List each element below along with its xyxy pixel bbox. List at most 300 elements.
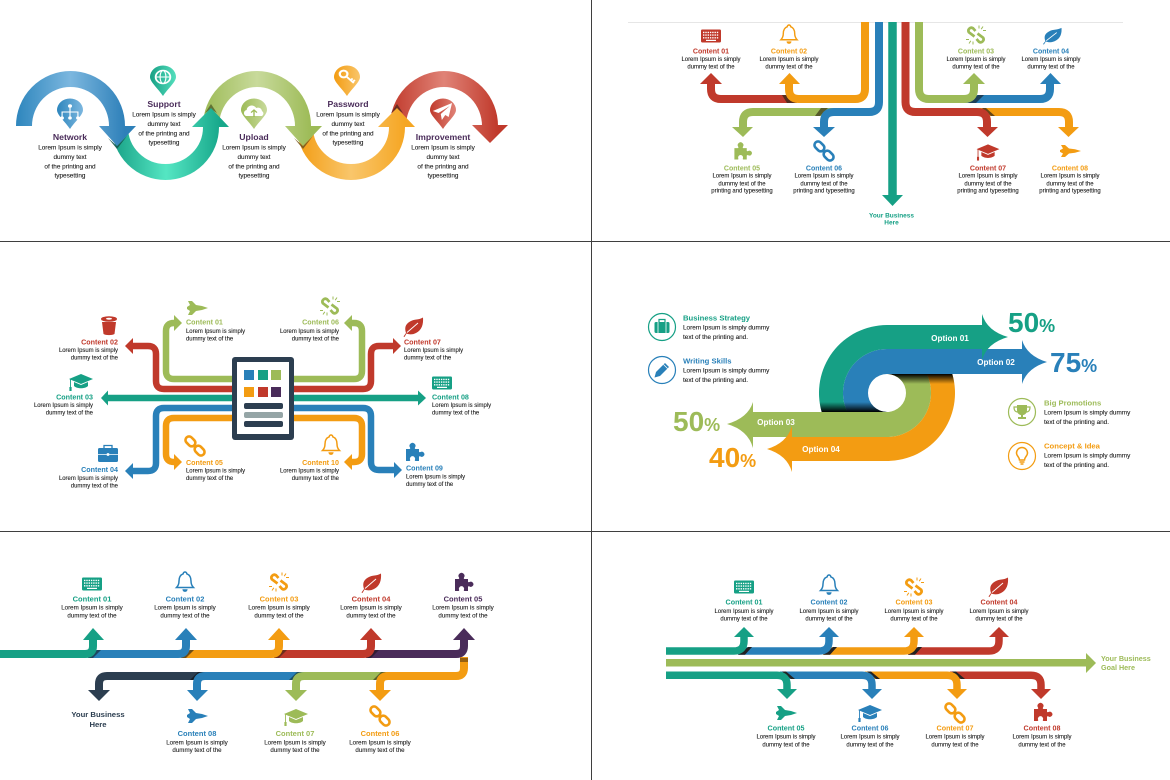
label: Content 06: dummy text of the (355, 747, 405, 754)
label: Content 01: Lorem Ipsum is simply (681, 57, 741, 63)
label: Content 06: Content 06 (806, 166, 842, 172)
label: Content 08: Content 08 (1052, 166, 1088, 172)
text: Writing Skills: text of the printing and. (683, 377, 748, 384)
label: Content 05: Content 05 (444, 594, 482, 604)
label: Content 04 (969, 598, 1029, 622)
pin icon: password key (334, 66, 360, 96)
label: Content 06 (840, 724, 900, 748)
label: Content 01: Content 01 (726, 598, 762, 606)
icon: rocket (776, 706, 797, 720)
label: Content 07 (404, 338, 463, 362)
label: Content 02 (154, 594, 217, 620)
label: Content 08: dummy text of the (172, 747, 222, 754)
label: Password: Lorem Ipsum is simply (316, 112, 381, 118)
label: Password (316, 99, 381, 146)
label: Content 03: Lorem Ipsum is simply (946, 57, 1006, 63)
label: Your Business Here: Here (884, 220, 899, 226)
label: Content 03: Content 03 (958, 48, 994, 56)
text: Writing Skills (683, 356, 770, 384)
label: Content 08: Lorem Ipsum is simply (432, 403, 491, 409)
label: Password: dummy text (331, 121, 365, 128)
label: Upload: typesetting (239, 172, 270, 180)
label: Content 09: Content 09 (406, 464, 443, 472)
icon: bin (101, 316, 117, 335)
label: Content 08: dummy text of the (432, 410, 480, 416)
icon: leaf (362, 574, 381, 593)
icon: puzzle (406, 443, 424, 461)
icon: bell (322, 435, 340, 455)
label: Content 08: Content 08 (178, 729, 216, 738)
label: Network: Lorem Ipsum is simply (38, 144, 103, 152)
label: Content 08 (1039, 166, 1101, 194)
band: option 03 green (727, 374, 931, 448)
blue arc arrow (24, 79, 136, 149)
text: Concept & Idea (1044, 442, 1131, 469)
red arc arrow (398, 79, 508, 143)
label: Content 10: Content 10 (302, 459, 339, 467)
text: Concept & Idea: text of the printing and. (1044, 462, 1109, 469)
label: Content 01 (714, 598, 774, 622)
label: Content 04: Content 04 (1033, 48, 1069, 56)
label: Your Business Goal Here (1101, 654, 1151, 672)
label: Your Business Goal Here: Goal Here (1101, 663, 1135, 672)
icon: chain (813, 140, 835, 162)
green arrow right (294, 315, 362, 379)
icon: keyboard (734, 580, 754, 594)
label: Password: typesetting (333, 140, 364, 146)
label: Content 05: Content 05 (724, 166, 760, 172)
label: Improvement: Lorem Ipsum is simply (411, 144, 476, 152)
label: Password: Password (327, 99, 369, 109)
label: Support: typesetting (149, 140, 180, 146)
green arc arrow (211, 79, 322, 149)
icon: chain (369, 705, 391, 727)
label: Content 09: dummy text of the (406, 482, 454, 488)
label: Support: Lorem Ipsum is simply (132, 112, 197, 118)
label: Content 05: Lorem Ipsum is simply (186, 468, 245, 474)
text: Concept & Idea: Lorem Ipsum is simply dummy (1044, 452, 1131, 460)
label: Option 02: Option 02 (977, 358, 1015, 367)
icon: puzzle (734, 142, 752, 160)
text: Writing Skills: Lorem Ipsum is simply dummy (683, 368, 770, 374)
label: Content 04: dummy text of the (346, 612, 396, 620)
label: Password: of the printing and (322, 130, 374, 138)
label: Content 07: dummy text of the (270, 747, 320, 754)
label: Content 02: dummy text of the (71, 356, 119, 362)
label: Network: of the printing and (44, 164, 96, 170)
label: Content 01 (186, 318, 245, 342)
orange arc arrow (305, 104, 415, 172)
icon: broken link (966, 26, 986, 44)
label: Content 03: Lorem Ipsum is simply (34, 403, 93, 409)
label: Content 08: Lorem Ipsum is simply (1040, 174, 1100, 180)
label: Content 03 (884, 598, 944, 622)
blue arrow right (294, 408, 402, 478)
label: Network: Network (53, 132, 87, 142)
green arrow left (166, 315, 232, 379)
label: Content 06: Content 06 (361, 729, 399, 738)
label: Upload: dummy text (237, 154, 271, 161)
label: Content 08: Lorem Ipsum is simply (1012, 734, 1072, 740)
label: Content 03: Lorem Ipsum is simply (248, 604, 311, 612)
label: Content 07: Content 07 (970, 166, 1006, 172)
label: Content 01: dummy text of the (687, 64, 735, 70)
label: Content 01: Lorem Ipsum is simply (714, 609, 774, 615)
value: 75 percent blue: 75% (1050, 347, 1097, 378)
icon: puzzle (455, 573, 473, 591)
label: Content 05: dummy text of the (762, 742, 810, 748)
purple top arrow 05 (366, 628, 475, 658)
orange arrow up (779, 22, 865, 99)
label: Content 07: Content 07 (276, 729, 314, 738)
band: option 01 teal (819, 314, 1008, 412)
label: Content 07: dummy text of the (404, 356, 452, 362)
label: Content 06: dummy text of the (846, 742, 894, 748)
icon: pencil circle (648, 356, 676, 384)
label: Content 08 (166, 729, 229, 754)
label: Content 08: Content 08 (1024, 724, 1060, 732)
icon: keyboard (701, 30, 721, 42)
label: Content 04: Content 04 (81, 466, 118, 474)
label: Content 07: Lorem Ipsum is simply (404, 348, 463, 354)
green goal arrow (666, 653, 1096, 673)
orange top arrow 03 (823, 627, 924, 655)
label: Improvement: typesetting (428, 172, 459, 180)
icon: cap (69, 374, 93, 391)
pin icon: improvement plane (430, 98, 456, 129)
label: Content 06 (349, 729, 412, 754)
label: Your Business Here: Your Business (869, 212, 914, 220)
panel: goal timeline (666, 575, 1151, 748)
label: Content 03: Content 03 (56, 394, 93, 402)
label: Option 04: Option 04 (802, 445, 840, 454)
label: Content 09: Lorem Ipsum is simply (406, 474, 465, 480)
label: Content 05 (756, 724, 816, 748)
label: Content 06 (280, 318, 340, 342)
label: Support: dummy text (147, 121, 181, 128)
panel: S-curve options (648, 307, 1131, 473)
icon: keyboard (82, 578, 102, 590)
icon: leaf (404, 318, 423, 337)
icon: chain (184, 435, 206, 457)
label: Content 07: dummy text of the (931, 742, 979, 748)
label: Content 01: Content 01 (186, 318, 223, 326)
label: Content 05: Content 05 (768, 724, 804, 732)
label: Content 06: dummy text of the (800, 182, 848, 188)
green lower arrow 07 (285, 672, 388, 701)
value: 50 percent teal: 50% (1008, 307, 1055, 338)
shadow under upper bands (887, 374, 955, 393)
label: Content 08: dummy text of the (1046, 182, 1094, 188)
orange top arrow 03 (181, 628, 290, 658)
label: Content 03: dummy text of the (952, 64, 1000, 70)
icon: keyboard (432, 376, 452, 390)
label: Upload (222, 132, 287, 180)
text: Concept & Idea: Concept & Idea (1044, 442, 1101, 450)
label: Content 06: dummy text of the (292, 336, 340, 342)
label: Content 02: dummy text of the (805, 616, 853, 622)
label: Your Business Here: Here (89, 720, 107, 729)
text: Big Promotions (1044, 398, 1131, 426)
label: Content 02: Lorem Ipsum is simply (759, 57, 819, 63)
panel: wave arrow process (24, 66, 508, 180)
icon: cap (284, 709, 308, 726)
label: Content 06: printing and typesetting (793, 188, 855, 194)
icon: chain (944, 702, 966, 724)
blue arrow down (813, 22, 879, 137)
label: Content 10 (280, 459, 340, 482)
value: 50 percent green: 50% (673, 406, 720, 437)
teal top arrow 01 (0, 628, 104, 654)
label: Content 03: dummy text of the (254, 612, 304, 620)
label: Improvement (411, 132, 476, 180)
icon: rocket (187, 709, 208, 723)
red top arrow 04 (908, 627, 1009, 655)
dark lower arrow (88, 672, 205, 701)
label: Your Business Here (869, 212, 914, 226)
blue arrow up right (962, 73, 1061, 103)
label: Content 05 (432, 594, 495, 620)
panel: two-row timeline (0, 572, 495, 754)
green arrow up (919, 22, 985, 99)
orange bottom arrow 07 (865, 672, 967, 699)
label: Content 06: Content 06 (852, 724, 888, 732)
label: Content 04: Lorem Ipsum is simply (1021, 57, 1081, 63)
pin icon: network (57, 98, 83, 129)
label: Your Business Here: Your Business (71, 710, 125, 719)
label: Content 04 (59, 466, 119, 490)
label: Content 01: Lorem Ipsum is simply (61, 604, 124, 612)
label: Content 01: Content 01 (693, 48, 729, 56)
label: Content 02: Content 02 (771, 48, 807, 56)
orange arrow left (166, 418, 232, 470)
label: Content 02: dummy text of the (765, 64, 813, 70)
blue top arrow 02 (738, 627, 839, 655)
label: Content 07: Lorem Ipsum is simply (958, 174, 1018, 180)
label: Content 04: dummy text of the (1027, 64, 1075, 70)
label: Content 07 (957, 166, 1019, 194)
label: Content 01: dummy text of the (67, 612, 117, 620)
teal bottom arrow 05 (666, 675, 797, 699)
icon: bell (176, 572, 194, 592)
orange lower arrow 06 (369, 657, 468, 701)
label: Content 03: Lorem Ipsum is simply (884, 609, 944, 615)
icon: broken link (320, 296, 340, 316)
pin icon: upload (241, 98, 267, 129)
teal top arrow 01 (666, 627, 754, 651)
label: Content 02: Content 02 (811, 598, 847, 606)
red arrow left (125, 338, 232, 389)
text: Business Strategy: Lorem Ipsum is simply dummy (683, 324, 770, 332)
shadow under lower bands (819, 393, 887, 412)
icon: cap (858, 705, 882, 722)
label: Support: of the printing and (138, 130, 190, 138)
icon: trophy circle (1008, 398, 1036, 426)
label: Content 05: Lorem Ipsum is simply (756, 734, 816, 740)
red arrow up left (700, 73, 797, 103)
blue top arrow 02 (88, 628, 197, 658)
text: Business Strategy: text of the printing and. (683, 334, 748, 341)
label: Content 07: dummy text of the (964, 182, 1012, 188)
label: Content 04: dummy text of the (975, 616, 1023, 622)
label: Content 07: Content 07 (937, 724, 973, 732)
label: Content 05 (186, 459, 245, 482)
text: Big Promotions: Lorem Ipsum is simply dummy (1044, 410, 1131, 416)
label: Improvement: of the printing and (417, 164, 469, 170)
label: Content 02 (59, 338, 119, 362)
label: Content 05: Content 05 (186, 459, 223, 467)
label: Content 02: Content 02 (166, 594, 204, 604)
label: Content 04 (340, 594, 403, 620)
red arrow right (294, 338, 401, 389)
label: Improvement: dummy text (426, 154, 460, 161)
label: Content 04: Content 04 (352, 594, 391, 604)
red top arrow 04 (274, 628, 382, 658)
blue lower arrow 08 (187, 672, 304, 701)
label: Content 08: Lorem Ipsum is simply (166, 740, 229, 746)
label: Option 01: Option 01 (931, 334, 969, 343)
label: Content 06: Lorem Ipsum is simply (840, 734, 900, 740)
teal arc arrow (120, 104, 229, 172)
icon: graduation cap (977, 144, 999, 161)
label: Content 02: Content 02 (81, 338, 118, 346)
label: Content 02: Lorem Ipsum is simply (59, 348, 118, 354)
blue arrow left (125, 408, 232, 479)
label: Content 04 (1021, 48, 1081, 70)
label: Content 01: dummy text of the (186, 336, 234, 342)
label: Content 04: Lorem Ipsum is simply (969, 609, 1029, 615)
label: Content 05: printing and typesetting (711, 188, 773, 194)
label: Content 07: Content 07 (404, 338, 441, 346)
icon: leaf (988, 578, 1008, 597)
label: Support (132, 99, 197, 146)
label: Content 03: Content 03 (260, 594, 298, 604)
icon: leaf (1043, 28, 1062, 44)
icon: bell (781, 25, 797, 44)
label: Content 03 (248, 594, 311, 620)
icon: bell (820, 575, 838, 595)
label: Upload: of the printing and (228, 164, 280, 170)
icon: bulb circle (1008, 442, 1036, 470)
pin icon: support (150, 66, 176, 96)
label: Content 06: Lorem Ipsum is simply (794, 174, 854, 180)
label: Your Business Here (71, 710, 125, 729)
label: Content 08: dummy text of the (1018, 742, 1066, 748)
label: Content 03 (946, 48, 1006, 70)
text: Big Promotions: Big Promotions (1044, 398, 1101, 408)
red arrow down (906, 22, 998, 137)
label: Content 06: Content 06 (302, 318, 339, 326)
label: Support: Support (147, 99, 181, 109)
label: Content 02 (759, 48, 819, 70)
label: Content 10: Lorem Ipsum is simply (280, 468, 339, 474)
label: Content 07: printing and typesetting (957, 188, 1019, 194)
label: Content 04: Lorem Ipsum is simply (59, 476, 118, 482)
icon: briefcase (98, 446, 118, 462)
label: Content 04: Content 04 (981, 598, 1017, 606)
label: Content 03: dummy text of the (46, 410, 94, 416)
label: Content 02 (799, 598, 859, 622)
blue bottom arrow 06 (780, 672, 882, 699)
teal main arrow (882, 22, 903, 206)
label: Content 07 (925, 724, 985, 748)
label: Content 05: Lorem Ipsum is simply (712, 174, 772, 180)
label: Network: typesetting (55, 172, 86, 180)
label: Content 08: printing and typesetting (1039, 188, 1101, 194)
label: Content 06 (793, 166, 855, 194)
label: Content 02: Lorem Ipsum is simply (154, 604, 217, 612)
label: Network (38, 132, 103, 180)
label: Content 10: dummy text of the (292, 476, 340, 482)
label: Content 07: Lorem Ipsum is simply (264, 740, 327, 746)
label: Content 01 (61, 594, 124, 620)
tablet device (232, 357, 294, 440)
orange arrow right (294, 418, 362, 470)
label: Content 09 (406, 464, 465, 488)
text: Business Strategy (683, 314, 770, 341)
label: Content 07 (264, 729, 327, 754)
icon: broken link (269, 572, 289, 592)
label: Content 07: Lorem Ipsum is simply (925, 734, 985, 740)
label: Content 01: dummy text of the (720, 616, 768, 622)
label: Content 02: Lorem Ipsum is simply (799, 609, 859, 615)
label: Content 02: dummy text of the (160, 612, 210, 620)
label: Improvement: Improvement (416, 132, 470, 142)
text: Big Promotions: text of the printing and. (1044, 419, 1109, 426)
label: Content 01 (681, 48, 741, 70)
icon: broken link (904, 578, 924, 596)
icon: rocket (1060, 145, 1081, 157)
text: Writing Skills: Writing Skills (683, 356, 732, 366)
label: Option 03: Option 03 (757, 418, 795, 427)
label: Content 01: Content 01 (73, 594, 111, 604)
label: Content 05 (711, 166, 773, 194)
icon: briefcase circle (648, 314, 676, 340)
label: Content 03: dummy text of the (890, 616, 938, 622)
label: Content 05: dummy text of the (718, 182, 766, 188)
band: option 04 orange (767, 374, 955, 472)
panel: vertical branching arrows (681, 22, 1101, 226)
label: Content 08 (1012, 724, 1072, 748)
label: Content 05: Lorem Ipsum is simply (432, 604, 495, 612)
label: Content 01: Lorem Ipsum is simply (186, 329, 245, 335)
label: Content 08: Content 08 (432, 394, 469, 402)
teal arrow both ways (101, 390, 426, 406)
label: Upload: Lorem Ipsum is simply (222, 144, 287, 152)
label: Content 04: dummy text of the (71, 484, 119, 490)
label: Content 05: dummy text of the (438, 612, 488, 620)
green arrow down left (732, 108, 836, 137)
text: Business Strategy: Business Strategy (683, 314, 751, 322)
value: 40 percent orange: 40% (709, 442, 756, 473)
panel: tablet hub arrows (34, 296, 491, 490)
label: Content 03 (34, 394, 94, 416)
label: Network: dummy text (53, 154, 87, 161)
label: Content 04: Lorem Ipsum is simply (340, 604, 403, 612)
label: Upload: Upload (239, 132, 269, 142)
icon: rocket (187, 301, 208, 315)
label: Content 08 (432, 394, 491, 416)
band: option 02 blue (843, 340, 1047, 412)
label: Content 03: Content 03 (896, 598, 932, 606)
label: Your Business Goal Here: Your Business (1101, 654, 1151, 663)
orange arrow down right (975, 108, 1079, 137)
icon: puzzle (1034, 703, 1052, 721)
label: Content 05: dummy text of the (186, 476, 234, 482)
red bottom arrow 08 (950, 672, 1051, 699)
label: Content 06: Lorem Ipsum is simply (280, 329, 339, 335)
label: Content 06: Lorem Ipsum is simply (349, 740, 412, 746)
